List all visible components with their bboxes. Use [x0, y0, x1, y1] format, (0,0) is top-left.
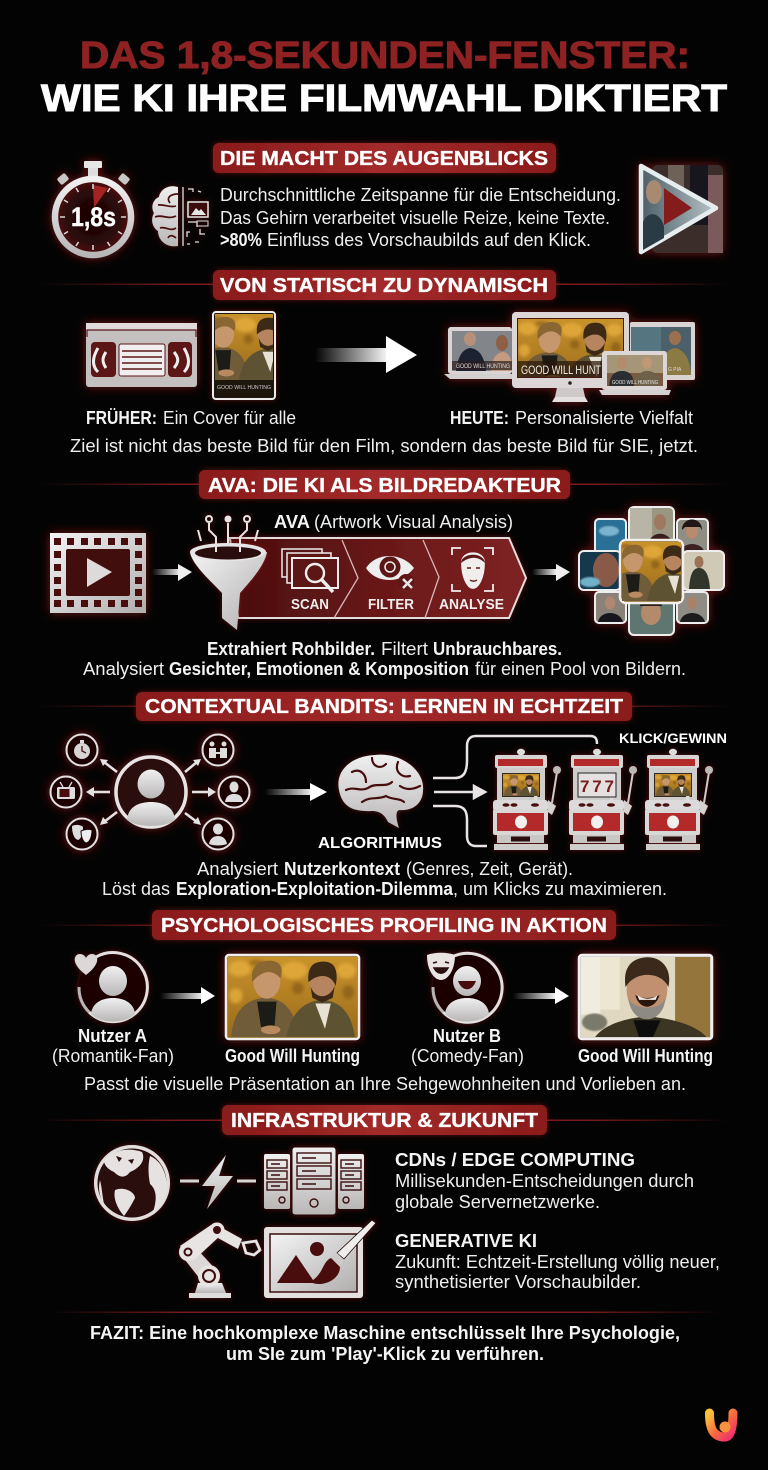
text: AVA description: Unbrauchbares.: [433, 639, 562, 659]
image: bottom right: [677, 592, 708, 623]
icon: scan: [282, 549, 338, 592]
image: top: [629, 507, 674, 549]
icon: group context: [202, 734, 234, 766]
icon: user A with heart: [75, 952, 148, 1022]
heading: AVA: [199, 470, 570, 499]
branches: algorithm to machines: [433, 736, 597, 846]
heading: AVA: AVA: DIE KI ALS BILDREDAKTEUR: [208, 475, 562, 497]
text: CDNs: CDNs / EDGE COMPUTING: [395, 1150, 635, 1170]
heading: Infrastruktur und Zukunft: INFRASTRUKTUR & ZUKUNFT: [231, 1110, 538, 1132]
text: CDNs: Millisekunden-Entscheidungen durch: [395, 1171, 694, 1191]
poster: Good Will Hunting cover: [192, 312, 296, 399]
text: Entscheidungszeit: Durchschnittliche Zeitspanne für die Entscheidung.: [220, 185, 621, 205]
heading: Contextual Bandits: CONTEXTUAL BANDITS: LERNEN IN ECHTZEIT: [145, 696, 623, 718]
text: Bandits description: Exploration-Exploitation-Dilemma: [176, 879, 454, 899]
banner: scan filter analyse pipeline: SCAN: [291, 596, 329, 613]
icon: face analysis: [452, 548, 493, 591]
icon: devices with personalised covers: GOOD WILL HUNTING: [612, 380, 658, 386]
label: Nutzer B: Nutzer B: [433, 1026, 501, 1046]
arrow: user A to image: [160, 987, 215, 1004]
image: romantic still: [226, 955, 359, 1039]
icon: logo: [710, 1413, 733, 1437]
arrow: statisch zu dynamisch: [315, 336, 417, 373]
divider line: [40, 484, 728, 485]
label: Nutzer B: [411, 1026, 524, 1066]
label: Nutzer A: Nutzer A: [78, 1026, 147, 1046]
icon: stopwatch context: [66, 734, 98, 766]
label: Good Will Hunting B: Good Will Hunting: [578, 1046, 713, 1066]
label: Heute: Personalisierte Vielfalt: [515, 408, 693, 428]
text: AVA description: Analysiert: [83, 659, 164, 679]
icon: lightning link: [180, 1155, 256, 1209]
text: Entscheidungszeit: Einfluss des Vorschaubilds auf den Klick.: [267, 230, 591, 250]
text: Bandits description: Nutzerkontext: [284, 859, 400, 879]
heading: Psychologisches Profiling: PSYCHOLOGISCHES PROFILING IN AKTION: [161, 915, 607, 937]
image: top right: [677, 519, 708, 554]
image: comedy still: [579, 955, 712, 1039]
image: right: [683, 551, 724, 590]
conclusion: FAZIT: Eine hochkomplexe Maschine entschlüsselt Ihre Psychologie,: [90, 1323, 680, 1343]
icon: generative image with brush: [264, 1220, 376, 1298]
banner: scan filter analyse pipeline: ANALYSE: [439, 596, 504, 613]
text: Generative KI: Zukunft: Echtzeit-Erstellung völlig neuer,: [395, 1252, 720, 1272]
panel: AVA: [50, 470, 724, 679]
panel: Infrastruktur und Zukunft: [94, 1105, 720, 1298]
text: Bandits description: [102, 859, 667, 899]
text: CDNs: globale Servernetzwerke.: [395, 1192, 600, 1212]
icon: slot machine 3: [645, 749, 713, 850]
label: Heute: HEUTE:: [450, 408, 509, 428]
conclusion: um SIe zum 'Play'-Klick zu verführen.: [226, 1344, 544, 1364]
icon: stopwatch 1,8s: 1,8s: [71, 202, 116, 232]
panel: Die Macht des Augenblicks: [55, 143, 723, 255]
text: profiling description: Passt die visuelle Präsentation an Ihre Sehgewohnheiten und Vorlieben an.: [84, 1074, 686, 1094]
poster: Good Will Hunting cover: GOOD WILL HUNTING: [217, 385, 271, 391]
text: AVA description: [83, 639, 686, 679]
arrow: user B to image: [513, 987, 569, 1004]
text: Bandits description: , um Klicks zu maximieren.: [453, 879, 667, 899]
text: Bandits description: (Genres, Zeit, Gerät).: [406, 859, 573, 879]
banner: scan filter analyse pipeline: FILTER: [368, 596, 414, 613]
arrow: pipeline to image pool: [532, 564, 570, 581]
heading: Infrastruktur und Zukunft: [222, 1105, 547, 1135]
icon: theatre masks: [66, 818, 98, 850]
image: bottom left: [595, 592, 626, 623]
arrow: film to funnel: [152, 564, 192, 581]
icon: filter eye: [366, 556, 414, 590]
icon: funnel: [190, 516, 267, 630]
heading: Von statisch zu dynamisch: VON STATISCH ZU DYNAMISCH: [220, 275, 548, 297]
label: Nutzer A: [52, 1026, 174, 1066]
icon: servers: [264, 1147, 364, 1215]
image: top left: [595, 519, 626, 554]
text: Generative KI: GENERATIVE KI: [395, 1231, 537, 1251]
arrows: context signals: [86, 759, 216, 825]
icon: devices with personalised covers: [444, 312, 695, 402]
text: Entscheidungszeit: [220, 185, 621, 250]
divider line: [40, 924, 728, 926]
icon: stopwatch 1,8s: [55, 161, 131, 255]
icon: slot machine 2 with 777: 777: [580, 777, 614, 796]
heading: Psychologisches Profiling: [152, 910, 616, 940]
label: Nutzer B: (Comedy-Fan): [411, 1046, 524, 1066]
image pool collage: [579, 507, 724, 635]
text: Bandits description: Löst das: [102, 879, 170, 899]
icon: VHS cassette: [86, 323, 197, 387]
image: centre still: [605, 540, 698, 603]
text: AVA description: Gesichter, Emotionen & Komposition: [169, 659, 469, 679]
icon: devices with personalised covers: GOOD WILL HUNTING: [456, 364, 510, 370]
panel: Contextual Bandits: [50, 692, 727, 899]
text: Bandits description: Analysiert: [197, 859, 278, 879]
icon: user B with mask: [427, 952, 502, 1022]
icon: large user: [116, 757, 186, 827]
divider line: [40, 1120, 728, 1121]
icon: robot arm: [179, 1222, 260, 1298]
image: left: [579, 551, 621, 590]
user context diagram: [50, 734, 250, 850]
label: Früher: Ein Cover für alle: [163, 408, 296, 428]
text: Ziel: Ziel ist nicht das beste Bild für den Film, sondern das beste Bild für SIE, jetzt.: [70, 436, 698, 456]
title: [41, 35, 727, 120]
banner: scan filter analyse pipeline: [230, 538, 526, 618]
icon: TV context: [50, 776, 82, 808]
label: Nutzer A: (Romantik-Fan): [52, 1046, 174, 1066]
text: AVA description: Extrahiert Rohbilder.: [207, 639, 375, 659]
heading: Die Macht des Augenblicks: [213, 143, 556, 173]
label: Klick/Gewinn: KLICK/GEWINN: [619, 730, 727, 746]
icon: slot machine 1: [493, 749, 561, 850]
text: CDNs: [395, 1150, 694, 1212]
text: AVA description: für einen Pool von Bildern.: [475, 659, 686, 679]
text: Entscheidungszeit: >80%: [220, 230, 262, 250]
text: Entscheidungszeit: Das Gehirn verarbeitet visuelle Reize, keine Texte.: [220, 208, 610, 228]
label: Algorithmus: ALGORITHMUS: [318, 835, 442, 852]
image: bottom: [629, 598, 674, 635]
label: Good Will Hunting A: Good Will Hunting: [225, 1046, 360, 1066]
panel: Von statisch zu dynamisch: [70, 270, 698, 456]
divider line: [40, 284, 728, 285]
heading: Die Macht des Augenblicks: DIE MACHT DES AUGENBLICKS: [220, 148, 548, 170]
divider line: [40, 706, 728, 707]
heading: Von statisch zu dynamisch: [213, 270, 556, 300]
icon: devices with personalised covers: GOOD WILL HUNT: [521, 363, 602, 377]
icon: business person: [218, 776, 250, 808]
heading: Contextual Bandits: [136, 692, 632, 721]
text: Generative KI: synthetisierter Vorschaubilder.: [395, 1272, 641, 1292]
label: Früher: FRÜHER:: [86, 408, 157, 428]
panel: Psychologisches Profiling: [52, 910, 713, 1094]
icon: play thumbnail: [641, 165, 723, 253]
title: DAS 1,8-SEKUNDEN-FENSTER:: [80, 35, 690, 77]
icon: film strip with play: [50, 533, 146, 613]
label: AVA Artwork Visual Analysis: (Artwork Visual Analysis): [314, 512, 513, 532]
text: AVA description: Filtert: [381, 639, 428, 659]
icon: person: [202, 818, 234, 850]
arrow: context to algorithm: [265, 783, 327, 801]
title: WIE KI IHRE FILMWAHL DIKTIERT: [41, 78, 727, 120]
divider line: [50, 1312, 720, 1313]
icon: slot machine 2 with 777: [569, 749, 637, 850]
label: AVA Artwork Visual Analysis: AVA: [274, 512, 310, 532]
icon: globe: [94, 1145, 170, 1221]
text: Generative KI: [395, 1231, 720, 1292]
conclusion: [90, 1323, 680, 1364]
icon: devices with personalised covers: G PIA: [668, 367, 682, 373]
icon: brain with visual circuits: [152, 186, 208, 246]
icon: algorithm brain: [338, 755, 423, 828]
